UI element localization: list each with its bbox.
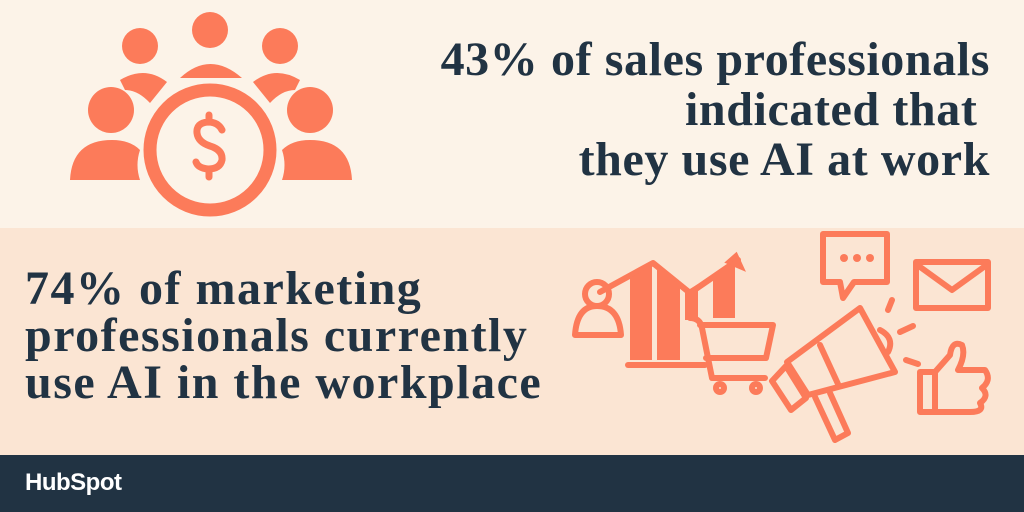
heading: sales stat: indicated that xyxy=(685,83,977,136)
panel: sales xyxy=(0,0,1024,228)
logo: HubSpot: HubSpot xyxy=(25,469,121,496)
icon: people with coin xyxy=(70,12,352,216)
heading: marketing stat: use AI in the workplace xyxy=(25,356,542,409)
panel: marketing xyxy=(0,228,1024,455)
heading: marketing stat: professionals currently xyxy=(25,309,528,362)
heading: marketing stat: 74% of marketing xyxy=(25,262,422,315)
heading: sales stat xyxy=(441,33,990,186)
footer xyxy=(0,455,1024,512)
heading: sales stat: they use AI at work xyxy=(579,133,990,186)
icon: marketing icons xyxy=(572,231,991,443)
heading: marketing stat xyxy=(25,262,542,409)
heading: sales stat: 43% of sales professionals xyxy=(441,33,990,86)
